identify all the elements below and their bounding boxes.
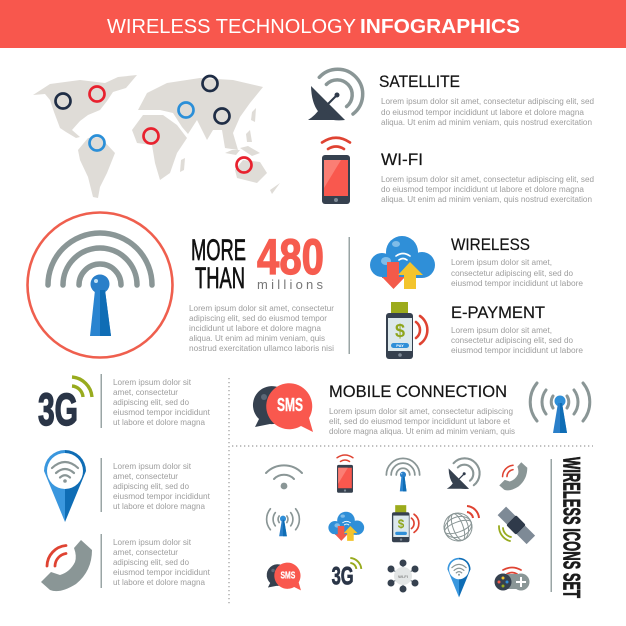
text: wireless: eiusmod tempor incididunt ut labore <box>451 278 583 288</box>
text: e-payment <box>451 325 583 355</box>
icon: e-payment <box>386 302 427 359</box>
text: wi-fi: do eiusmod tempor incididunt ut labore et dolore magna <box>381 184 584 194</box>
text: wi-fi: Lorem ipsum dolor sit amet, consectetur adipiscing elit, sed <box>381 174 594 184</box>
icon: antenna <box>267 509 299 536</box>
text: e-payment: eiusmod tempor incididunt ut labore <box>451 345 583 355</box>
text: handset: eiusmod tempor incididunt <box>113 567 211 577</box>
icon: cloud <box>328 512 364 541</box>
icon: payment <box>392 505 419 542</box>
icon: sms bubbles <box>253 383 313 432</box>
text: stat: aliqua. Ut enim ad minim veniam, quis <box>189 333 326 343</box>
stat: more than 480 millions: millions <box>257 277 324 292</box>
heading: wi-fi: WI-FI <box>381 150 423 169</box>
icon: location pin <box>44 450 86 522</box>
text: handset <box>113 537 211 587</box>
text: mobile connection: Lorem ipsum dolor sit amet, consectetur adipiscing <box>329 406 513 416</box>
text: pin: amet, consectetur <box>113 471 178 481</box>
icon: dish <box>447 458 480 489</box>
icon: payment: $ <box>398 518 405 531</box>
stat: more than 480 millions: MORE <box>191 234 246 267</box>
text: handset: adipiscing elit, sed do <box>113 557 189 567</box>
icon: sms <box>267 563 301 590</box>
text: satellite: aliqua. Ut enim ad minim veniam, quis nostrud exercitation <box>381 117 592 127</box>
text: wireless: consectetur adipiscing elit, sed do <box>451 268 573 278</box>
text: mobile connection <box>329 406 516 436</box>
text: stat: incididunt ut labore et dolore magna <box>189 323 321 333</box>
icon: globe <box>440 506 479 545</box>
stat: more than 480 millions: 480 <box>257 229 324 285</box>
text: wi-fi: aliqua. Ut enim ad minim veniam, quis nostrud exercitation <box>381 194 592 204</box>
text: satellite: Lorem ipsum dolor sit amet, consectetur adipiscing elit, sed <box>381 96 594 106</box>
title <box>107 15 520 38</box>
text: pin: adipiscing elit, sed do <box>113 481 189 491</box>
world map <box>33 75 280 198</box>
text: stat: nostrud exercitation ullamco laboris nisi <box>189 343 334 353</box>
text: handset: ut labore et dolore magna <box>113 577 205 587</box>
text: pin: eiusmod tempor incididunt <box>113 491 211 501</box>
icon: wi-fi hub <box>388 560 418 592</box>
icon: wi-fi hub: WI-FI <box>398 574 408 579</box>
icon: cloud <box>370 236 435 289</box>
text: pin: Lorem ipsum dolor sit <box>113 461 192 471</box>
text: wireless <box>451 257 583 288</box>
icons grid <box>266 455 536 597</box>
icon: 3g: 3G <box>332 563 354 590</box>
text: handset: amet, consectetur <box>113 547 178 557</box>
text: mobile connection: elit, sed do eiusmod tempor incididunt ut labore et <box>329 416 511 426</box>
text: 3G: ut labore et dolore magna <box>113 417 205 427</box>
text: 3G: Lorem ipsum dolor sit <box>113 377 192 387</box>
heading: mobile connection: MOBILE CONNECTION <box>329 382 507 401</box>
heading: wireless: WIRELESS <box>451 235 530 254</box>
text: 3G: amet, consectetur <box>113 387 178 397</box>
text: 3G: eiusmod tempor incididunt <box>113 407 211 417</box>
text: e-payment: Lorem ipsum dolor sit amet, <box>451 325 552 335</box>
text: 3G: adipiscing elit, sed do <box>113 397 189 407</box>
icon: sms bubbles: SMS <box>277 395 303 415</box>
title: INFOGRAPHICS <box>360 15 520 38</box>
header banner <box>0 0 626 48</box>
text: stat: Lorem ipsum dolor sit amet, consectetur <box>189 303 334 313</box>
icon: antenna arcs <box>386 458 420 491</box>
heading: satellite: SATELLITE <box>379 72 460 91</box>
text: stat: adipiscing elit, sed do eiusmod tempor <box>189 313 327 323</box>
text: wireless: Lorem ipsum dolor sit amet, <box>451 257 552 267</box>
icon: wi-fi phone <box>322 138 350 204</box>
stat: more than 480 millions <box>191 229 324 295</box>
icon: phone <box>337 455 353 493</box>
icon: e-payment: PAY <box>396 343 404 348</box>
icon: sms: SMS <box>280 570 295 581</box>
icon: satellite dish <box>308 69 363 120</box>
icon: antenna with signal <box>530 383 590 433</box>
icon: pin <box>447 558 471 597</box>
stat: more than 480 millions: THAN <box>195 262 245 295</box>
text: stat <box>189 303 334 353</box>
text: satellite <box>381 96 594 127</box>
text: mobile connection: dolore magna aliqua. Ut enim ad minim veniam, quis <box>329 426 516 436</box>
icon: e-payment: $ <box>395 321 405 341</box>
icon: gamepad <box>494 568 530 590</box>
text: handset: Lorem ipsum dolor sit <box>113 537 192 547</box>
text: e-payment: consectetur adipiscing elit, sed do <box>451 335 573 345</box>
icon: big antenna in circle <box>28 212 172 358</box>
icon: 3G: 3G <box>38 384 78 435</box>
icon: satellite <box>497 506 536 545</box>
text: pin <box>113 461 211 511</box>
icon: handset <box>499 462 527 490</box>
icon: handset <box>41 540 92 591</box>
text: wi-fi <box>381 174 594 204</box>
icon: wifi <box>266 465 302 489</box>
text: 3G <box>113 377 211 427</box>
heading: e-payment: E-PAYMENT <box>451 303 545 322</box>
map markers <box>56 76 252 172</box>
text: pin: ut labore et dolore magna <box>113 501 205 511</box>
title: WIRELESS TECHNOLOGY <box>107 15 356 38</box>
text: satellite: do eiusmod tempor incididunt ut labore et dolore magna <box>381 107 584 117</box>
